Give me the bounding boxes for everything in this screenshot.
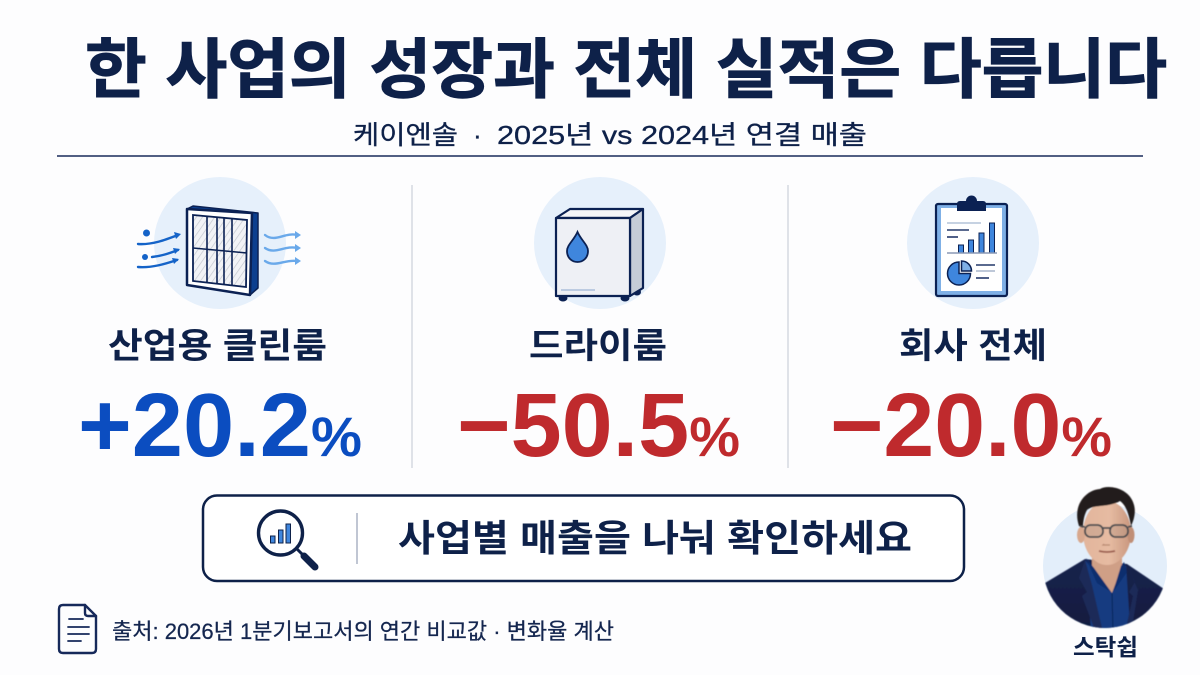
presenter name: 스탁쉽 (1073, 634, 1138, 660)
callout text: 사업별 매출을 나눠 확인하세요 (398, 518, 912, 559)
value: +20.2%: +20.2% (78, 376, 362, 476)
icon: clipboard report (907, 177, 1039, 309)
icon: air filter (138, 177, 301, 309)
source note (59, 605, 614, 653)
title: 한 사업의 성장과 전체 실적은 다릅니다 (85, 33, 1167, 106)
callout (203, 496, 964, 581)
label: whole company: 회사 전체 (899, 327, 1047, 366)
label: industrial cleanroom: 산업용 클린룸 (108, 327, 327, 366)
panel: dry room (457, 177, 740, 476)
subtitle: · (473, 120, 482, 150)
icon: magnifier with bars (258, 511, 315, 567)
subtitle (353, 120, 867, 150)
value: -20.0%: −20.0% (830, 376, 1112, 476)
subtitle: 케이엔솔 (353, 120, 458, 150)
label: dry room: 드라이룸 (529, 327, 667, 366)
icon: document (59, 605, 96, 653)
icon: dehumidifier (534, 177, 666, 309)
value: -50.5%: −50.5% (457, 376, 740, 476)
source text: 출처: 2026년 1분기보고서의 연간 비교값 · 변화율 계산 (112, 619, 614, 644)
subtitle: 2025년 vs 2024년 연결 매출 (497, 120, 867, 150)
presenter avatar (1043, 487, 1167, 660)
panel: industrial cleanroom (78, 177, 362, 476)
panel: whole company (830, 177, 1112, 476)
